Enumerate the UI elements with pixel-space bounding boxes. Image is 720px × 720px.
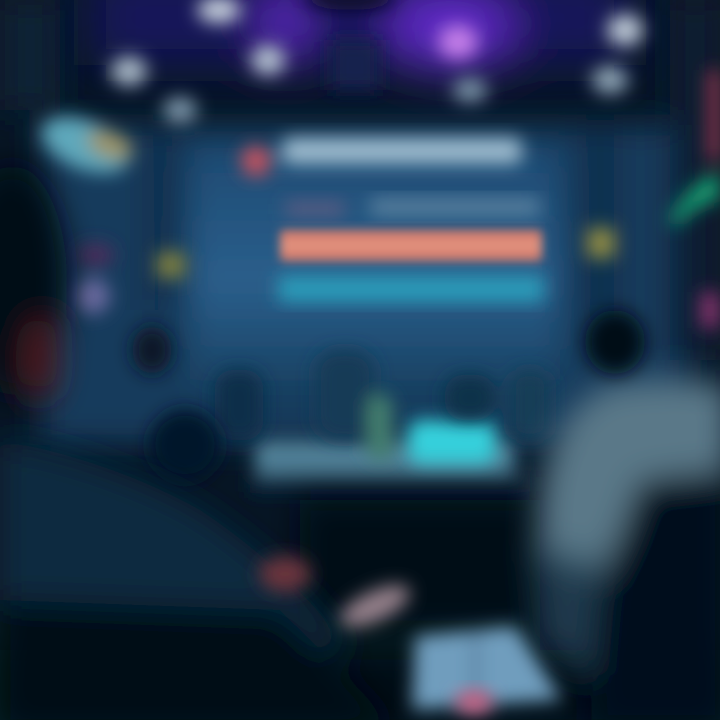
- ceiling lamps: [111, 0, 643, 123]
- right edge neon accents: [668, 70, 720, 328]
- panelists: [215, 350, 550, 460]
- back wall: [0, 0, 720, 445]
- left wall chart: [33, 106, 137, 184]
- foreground audience member, left: [0, 165, 400, 720]
- stage table and people: [215, 350, 550, 492]
- hands: [259, 556, 416, 636]
- small wall tags: [74, 228, 615, 314]
- audience member, right: [530, 310, 720, 720]
- dark lower floor: [0, 500, 720, 720]
- screen title bar: [241, 138, 522, 176]
- screen cyan band: [278, 276, 544, 302]
- ceiling lights and purple glow: [90, 0, 643, 123]
- table: [250, 440, 530, 492]
- pink book accent: [455, 690, 493, 714]
- screen small text row: [285, 198, 540, 216]
- audience member, mid-left: [132, 326, 221, 481]
- screen orange band: [280, 230, 542, 261]
- open book: [412, 626, 562, 710]
- glowing cyan table panel: [408, 420, 496, 464]
- hands and open book: [259, 556, 562, 714]
- main presentation screen: [241, 138, 544, 302]
